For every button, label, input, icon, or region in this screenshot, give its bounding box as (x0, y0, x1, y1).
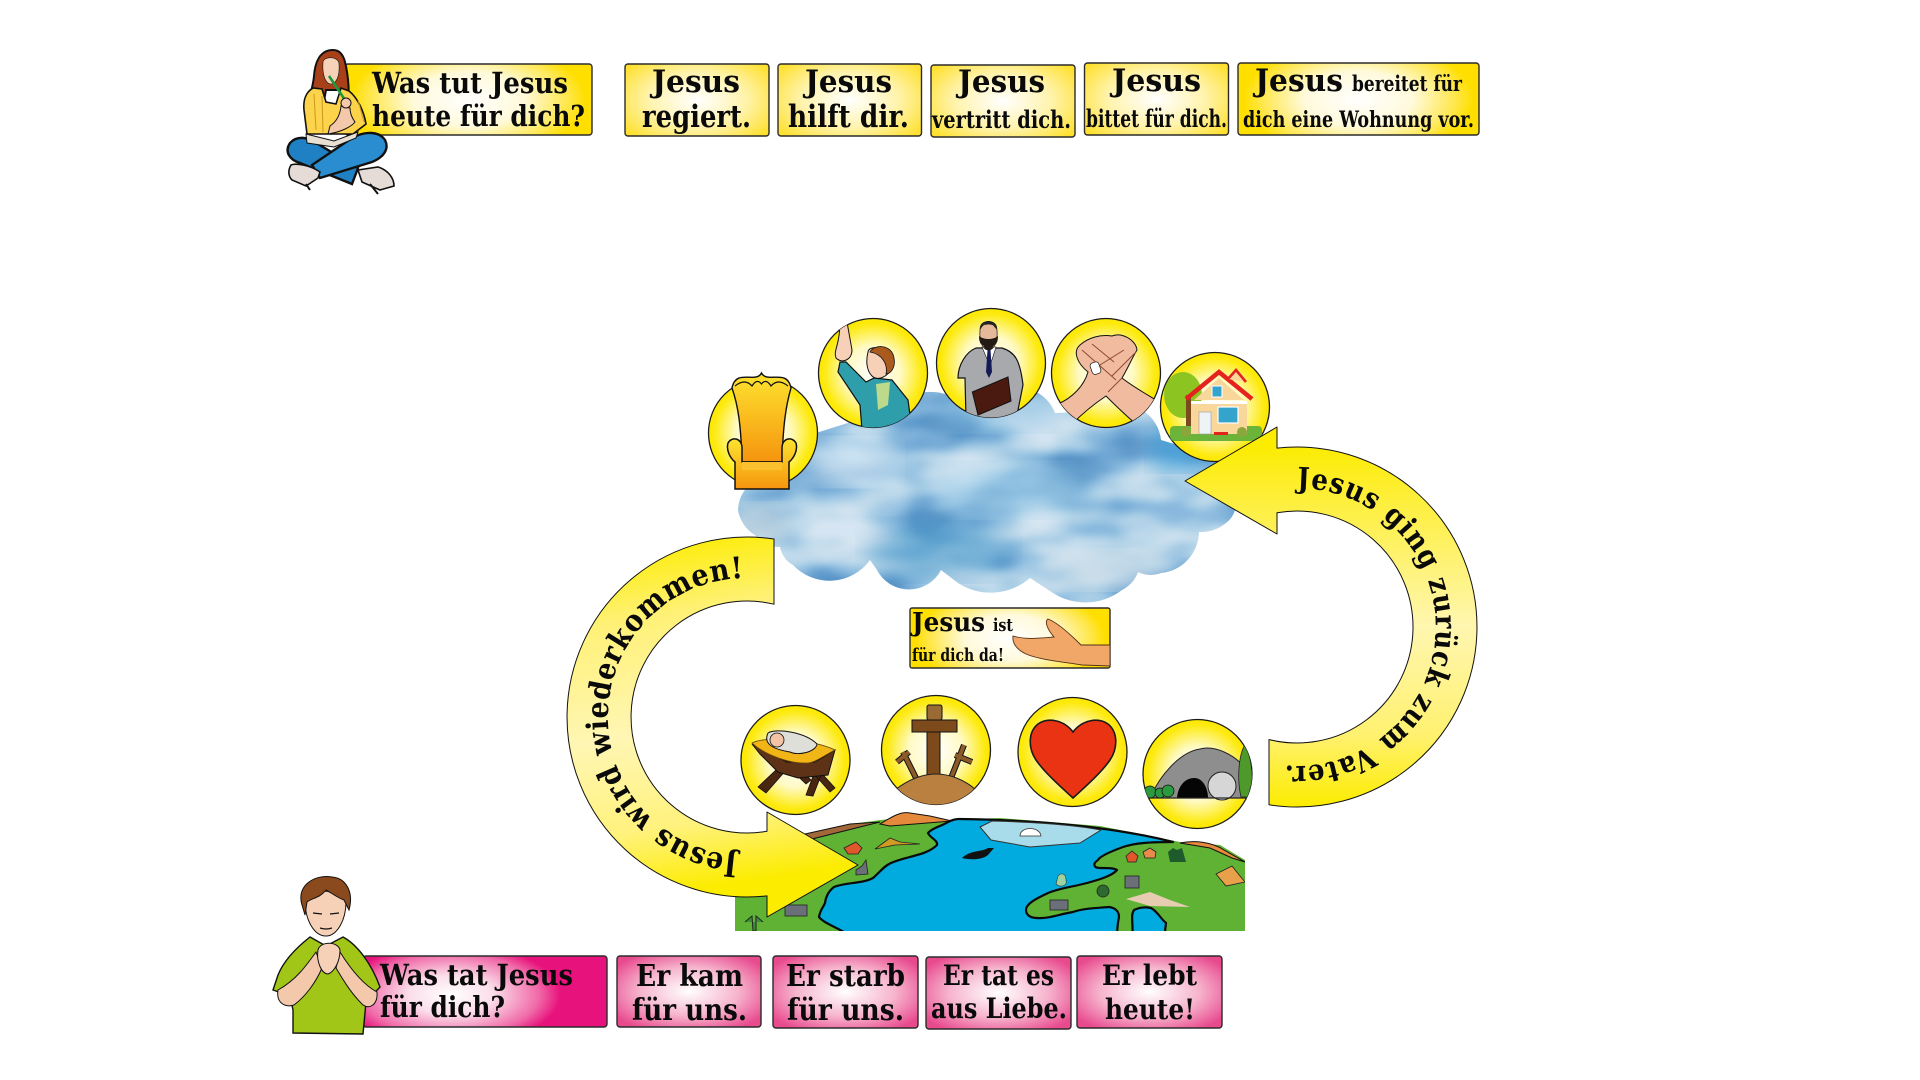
text box: Jesus ist für dich da! with hand: für dich da! (912, 645, 1004, 666)
box: Er tat es aus Liebe.: Er tat es (943, 959, 1054, 992)
box: Jesus regiert.: regiert. (642, 99, 751, 135)
text box: Jesus ist für dich da! with hand: Jesus (910, 608, 985, 638)
icon: throne (708, 373, 818, 489)
box: Er tat es aus Liebe. (926, 957, 1071, 1029)
box: Jesus vertritt dich.: Jesus (955, 64, 1045, 100)
box: Jesus vertritt dich. (931, 64, 1075, 137)
question box: Was tat Jesus für dich?: für dich? (380, 990, 505, 1024)
question box: Was tat Jesus für dich?: Was tat Jesus (379, 958, 573, 992)
box: Er starb für uns.: Er starb (786, 959, 905, 994)
question box: Was tat Jesus für dich? (363, 956, 607, 1027)
box: Jesus hilft dir.: Jesus (802, 64, 892, 100)
box: Er starb für uns.: für uns. (787, 993, 904, 1028)
box: Er kam für uns.: für uns. (632, 993, 747, 1028)
girl reading with book (288, 50, 394, 194)
cloud (730, 385, 1245, 605)
box: Jesus bereitet für dich eine Wohnung vor.: Jesus (1252, 63, 1343, 99)
text box: Jesus ist für dich da! with hand (910, 608, 1110, 668)
box: Jesus bittet für dich. (1084, 63, 1228, 135)
box: Er kam für uns. (617, 956, 761, 1028)
icon: lawyer with briefcase (936, 308, 1046, 420)
text box: Jesus ist für dich da! with hand: ist (993, 615, 1014, 636)
box: Er lebt heute! (1077, 956, 1222, 1028)
icon: house (1160, 352, 1270, 462)
box: Er kam für uns.: Er kam (636, 959, 743, 994)
arrow: Jesus ging zurück zum Vater.: Jesus ging zurück zum Vater. (1286, 466, 1458, 782)
question box: Was tut Jesus heute für dich?: heute für dich? (372, 99, 585, 133)
icon: three crosses on a hill (882, 696, 990, 810)
arrow: Jesus wird wiederkommen! (566, 536, 858, 918)
box: Jesus bittet für dich.: Jesus (1109, 63, 1201, 99)
box: Jesus bittet für dich.: bittet für dich. (1086, 104, 1227, 133)
box: Jesus hilft dir.: hilft dir. (788, 99, 909, 135)
arrow: Jesus ging zurück zum Vater. (1184, 426, 1478, 808)
box: Jesus bereitet für dich eine Wohnung vor. (1238, 63, 1479, 135)
box: Er lebt heute!: Er lebt (1102, 959, 1197, 992)
arrow: Jesus wird wiederkommen!: Jesus wird wiederkommen! (585, 556, 740, 878)
box: Er lebt heute!: heute! (1105, 993, 1195, 1026)
boy praying (273, 877, 380, 1034)
box: Jesus vertritt dich.: vertritt dich. (931, 105, 1071, 134)
earth landscape (735, 813, 1245, 940)
box: Jesus regiert.: Jesus (649, 64, 740, 100)
question box: Was tut Jesus heute für dich?: Was tut Jesus (371, 66, 568, 100)
icon: boy holding a hand (818, 318, 928, 430)
box: Jesus bereitet für dich eine Wohnung vor.: dich eine Wohnung vor. (1243, 107, 1474, 133)
box: Jesus hilft dir. (778, 64, 922, 136)
box: Jesus regiert. (625, 64, 769, 136)
icon: heart (1018, 698, 1127, 806)
icon: empty tomb (1143, 720, 1253, 828)
box: Er starb für uns. (773, 956, 918, 1028)
question box: Was tut Jesus heute für dich? (345, 64, 592, 135)
box: Er tat es aus Liebe.: aus Liebe. (931, 992, 1067, 1025)
box: Jesus bereitet für dich eine Wohnung vor.: bereitet für (1352, 71, 1463, 96)
icon: baby in manger (741, 706, 850, 814)
icon: praying hands (1052, 318, 1160, 428)
